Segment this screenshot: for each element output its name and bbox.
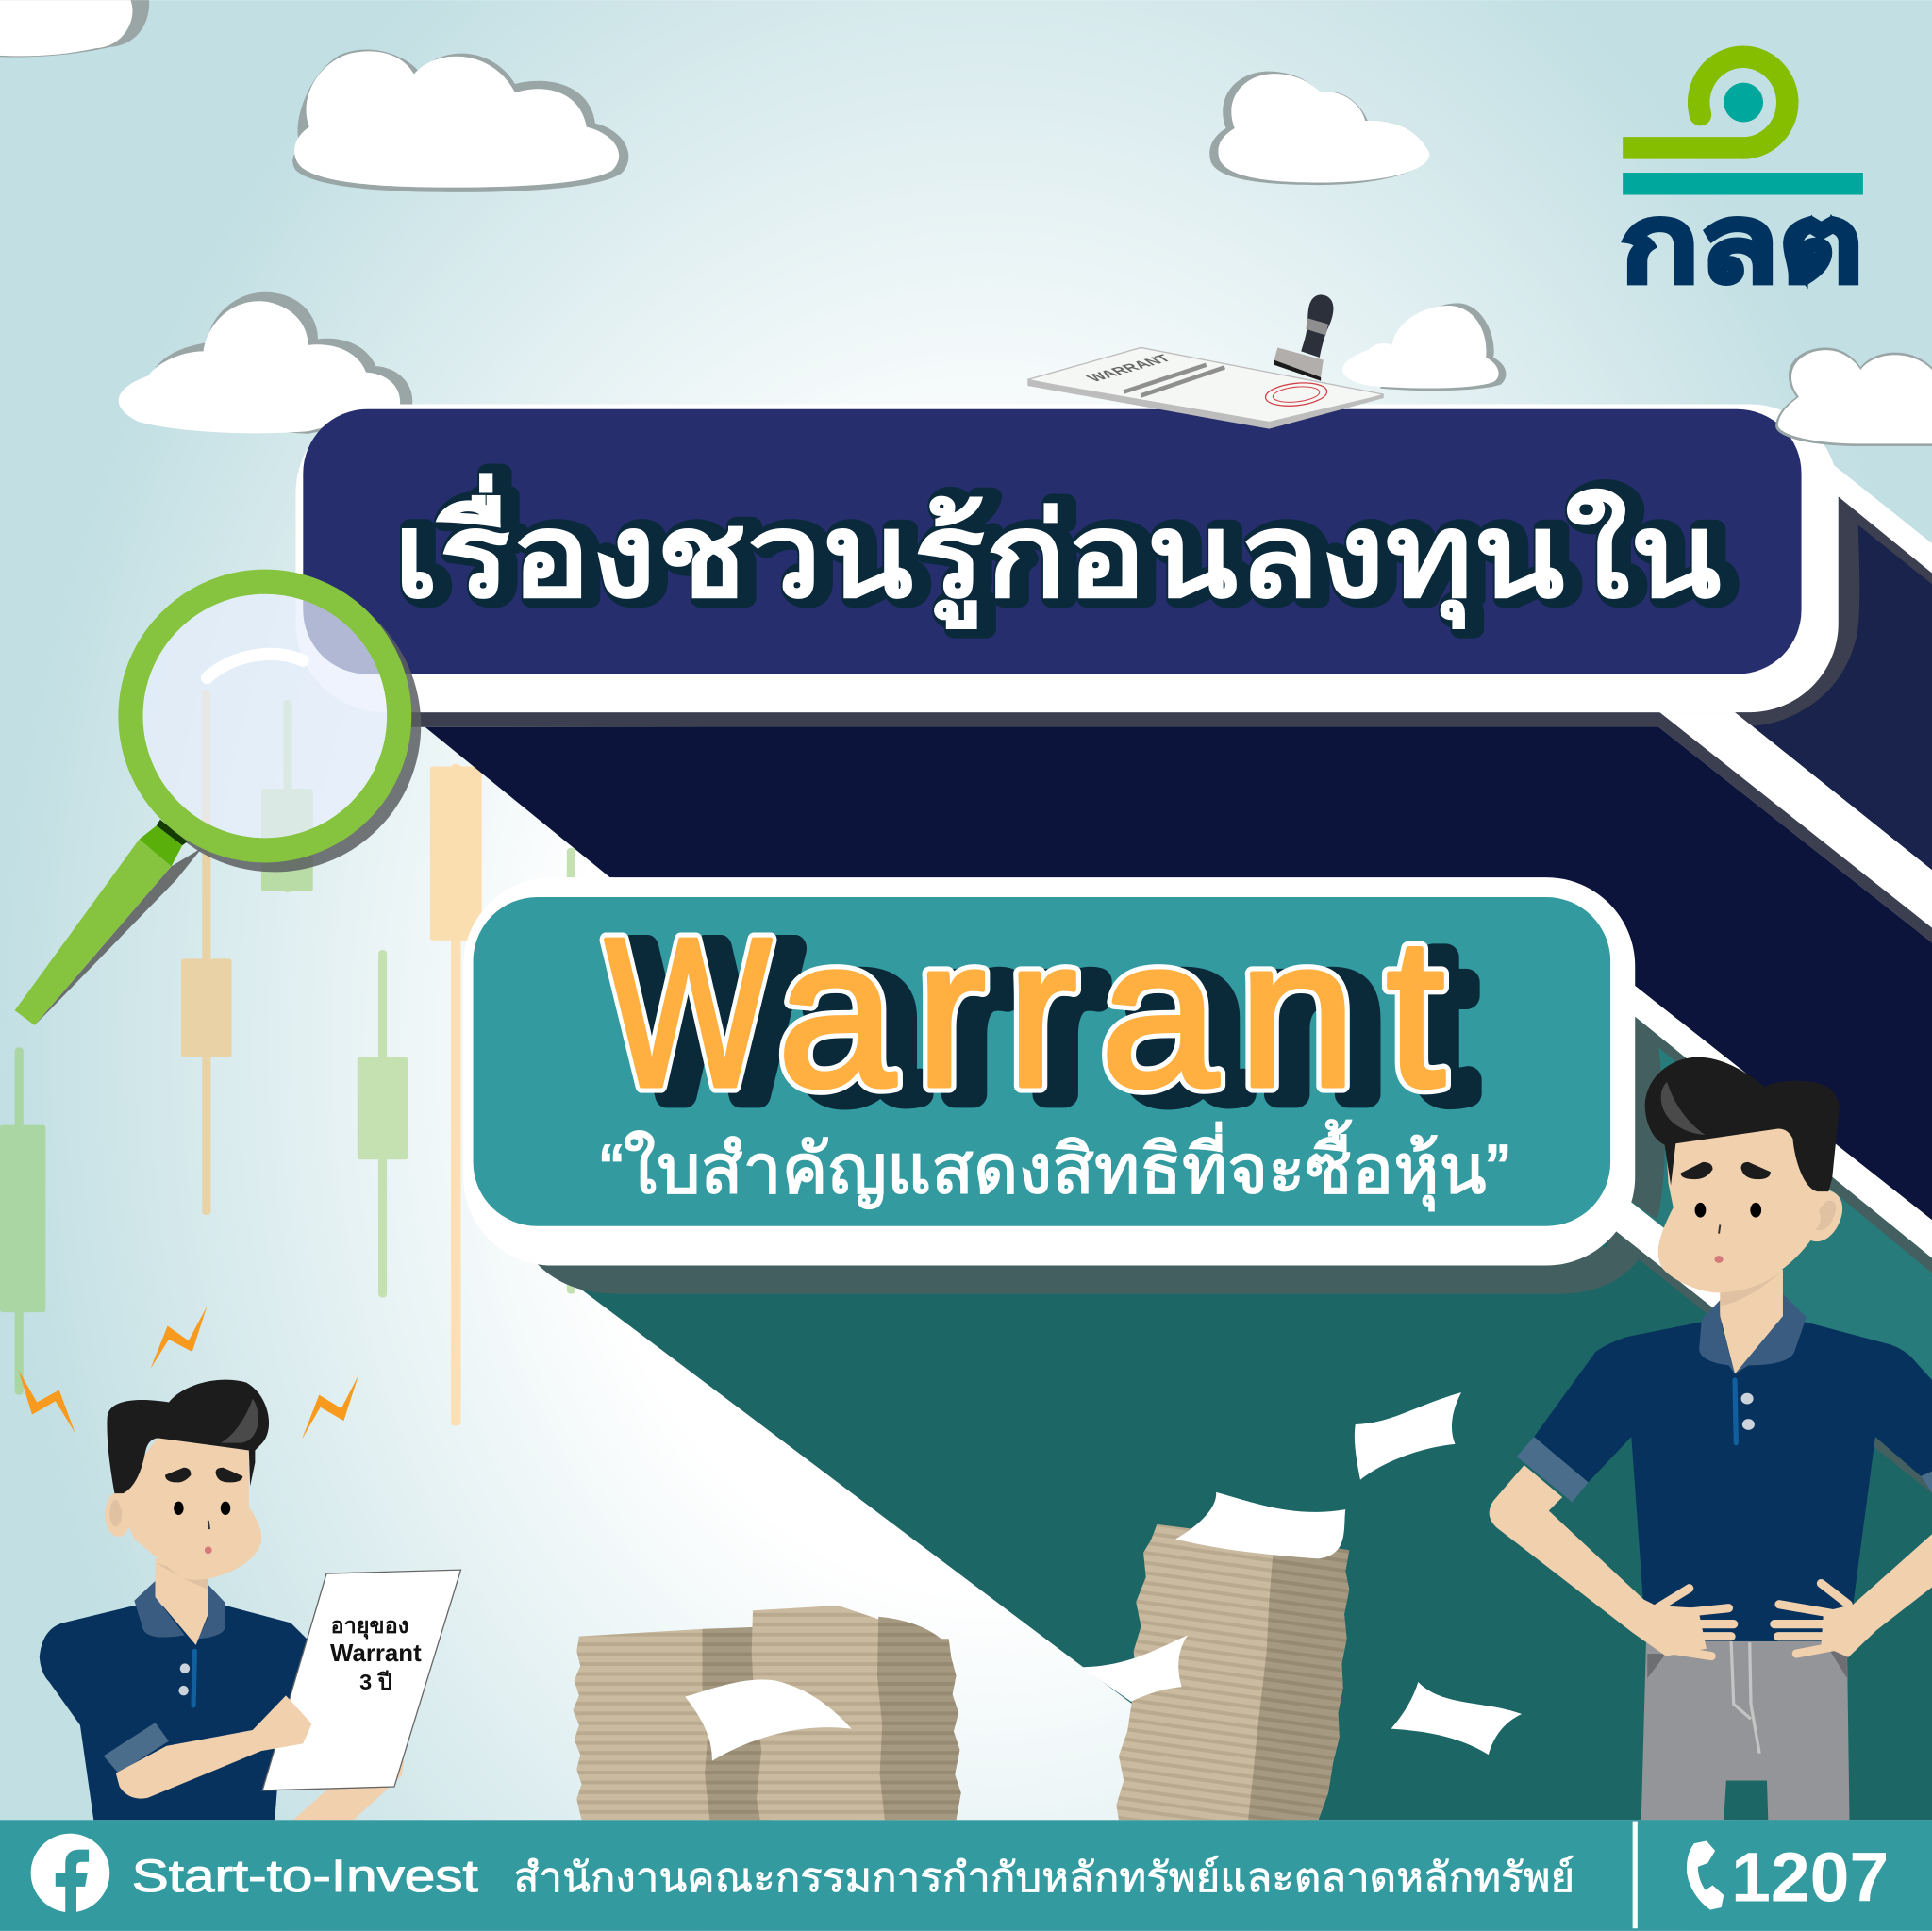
footer bar	[0, 1820, 1932, 1931]
title text: เรื่องชวนรู้ก่อนลงทุนใน	[393, 473, 1722, 629]
left man collar	[134, 1581, 225, 1639]
left man neck	[156, 1558, 208, 1645]
icon: facebook	[31, 1834, 109, 1914]
left man paper	[262, 1570, 460, 1790]
subtitle: “ใบสำคัญแสดงสิทธิที่จะซื้อหุ้น”	[600, 1119, 1509, 1211]
candlestick chart	[0, 691, 575, 1425]
right man collar	[1699, 1294, 1807, 1373]
right man cuffs	[1517, 1437, 1932, 1502]
right man neck	[1720, 1269, 1783, 1373]
right man ear	[1808, 1189, 1842, 1241]
cloud: top centre	[1209, 72, 1429, 185]
character: left man	[19, 1307, 460, 1820]
magnifying glass	[15, 582, 409, 1025]
dark green wall	[530, 1224, 1932, 1820]
right man features	[1681, 1162, 1771, 1263]
Warrant shadow: arrant	[802, 903, 1470, 1140]
left man buttons	[178, 1651, 194, 1706]
cloud: top left corner	[0, 0, 149, 58]
cloud: right edge	[1775, 347, 1932, 446]
document label: WARRANT	[1083, 352, 1174, 384]
warrant document	[1027, 347, 1384, 429]
right man left arm	[1490, 1465, 1734, 1656]
paper stack: left	[573, 1606, 961, 1820]
paper text: อายุของ	[330, 1613, 408, 1640]
white strip between navy and teal	[1629, 981, 1932, 1258]
left man cuff	[104, 1723, 169, 1773]
Warrant panel	[463, 877, 1665, 1294]
left man shirt	[40, 1606, 307, 1820]
strip shadow	[1635, 1017, 1932, 1273]
flying papers	[685, 1392, 1522, 1761]
right man face	[1658, 1122, 1821, 1292]
logo wordmark: กลต	[1621, 184, 1863, 305]
organisation name: สำนักงานคณะกรรมการกำกับหลักทรัพย์และตลาดหลักทรัพย์	[514, 1856, 1574, 1901]
left man ear	[105, 1492, 132, 1537]
cloud: mid left	[119, 292, 412, 434]
left man neck shadow	[156, 1562, 208, 1590]
lower white strip	[1607, 1196, 1932, 1493]
right man neck shadow	[1720, 1271, 1783, 1307]
paper stack: right	[1116, 1524, 1349, 1820]
icon: phone	[1687, 1841, 1724, 1910]
title banner	[295, 405, 1839, 712]
icon: lightning bolts	[19, 1307, 358, 1440]
Warrant shadow: W	[629, 903, 796, 1140]
logo	[1621, 57, 1863, 305]
right man hair	[1645, 1057, 1840, 1191]
title shadow: เรื่องชวนรู้ก่อนลงทุนใน	[402, 473, 1730, 629]
Warrant heading outline: arrant	[777, 894, 1445, 1131]
right man shirt	[1534, 1323, 1932, 1641]
lower navy 3D wall	[407, 712, 1932, 1220]
hotline number: 1207	[1731, 1838, 1889, 1917]
left man hair	[107, 1380, 269, 1493]
lighter teal wall	[1624, 1017, 1932, 1440]
left man face	[114, 1438, 261, 1580]
right man buttons	[1735, 1380, 1755, 1443]
left man forearm	[116, 1695, 311, 1799]
Warrant heading: arrant	[777, 894, 1445, 1131]
character: right man	[1490, 1057, 1932, 1820]
left man paper: Warrant	[330, 1639, 422, 1667]
cloud: upper left	[292, 49, 628, 192]
right man right arm	[1774, 1534, 1932, 1657]
Warrant heading outline: W	[605, 894, 772, 1131]
left man paper: 3 ปี	[359, 1670, 392, 1694]
left man features	[165, 1468, 242, 1554]
facebook page name: Start-to-Invest	[132, 1851, 478, 1902]
cloud: beside stamp	[1342, 303, 1506, 391]
right man pants	[1641, 1641, 1849, 1820]
upper navy 3D wall	[1735, 438, 1932, 870]
left man far hand	[293, 1759, 404, 1820]
Warrant heading: W	[605, 894, 772, 1131]
icon: rubber stamp	[1274, 294, 1333, 381]
